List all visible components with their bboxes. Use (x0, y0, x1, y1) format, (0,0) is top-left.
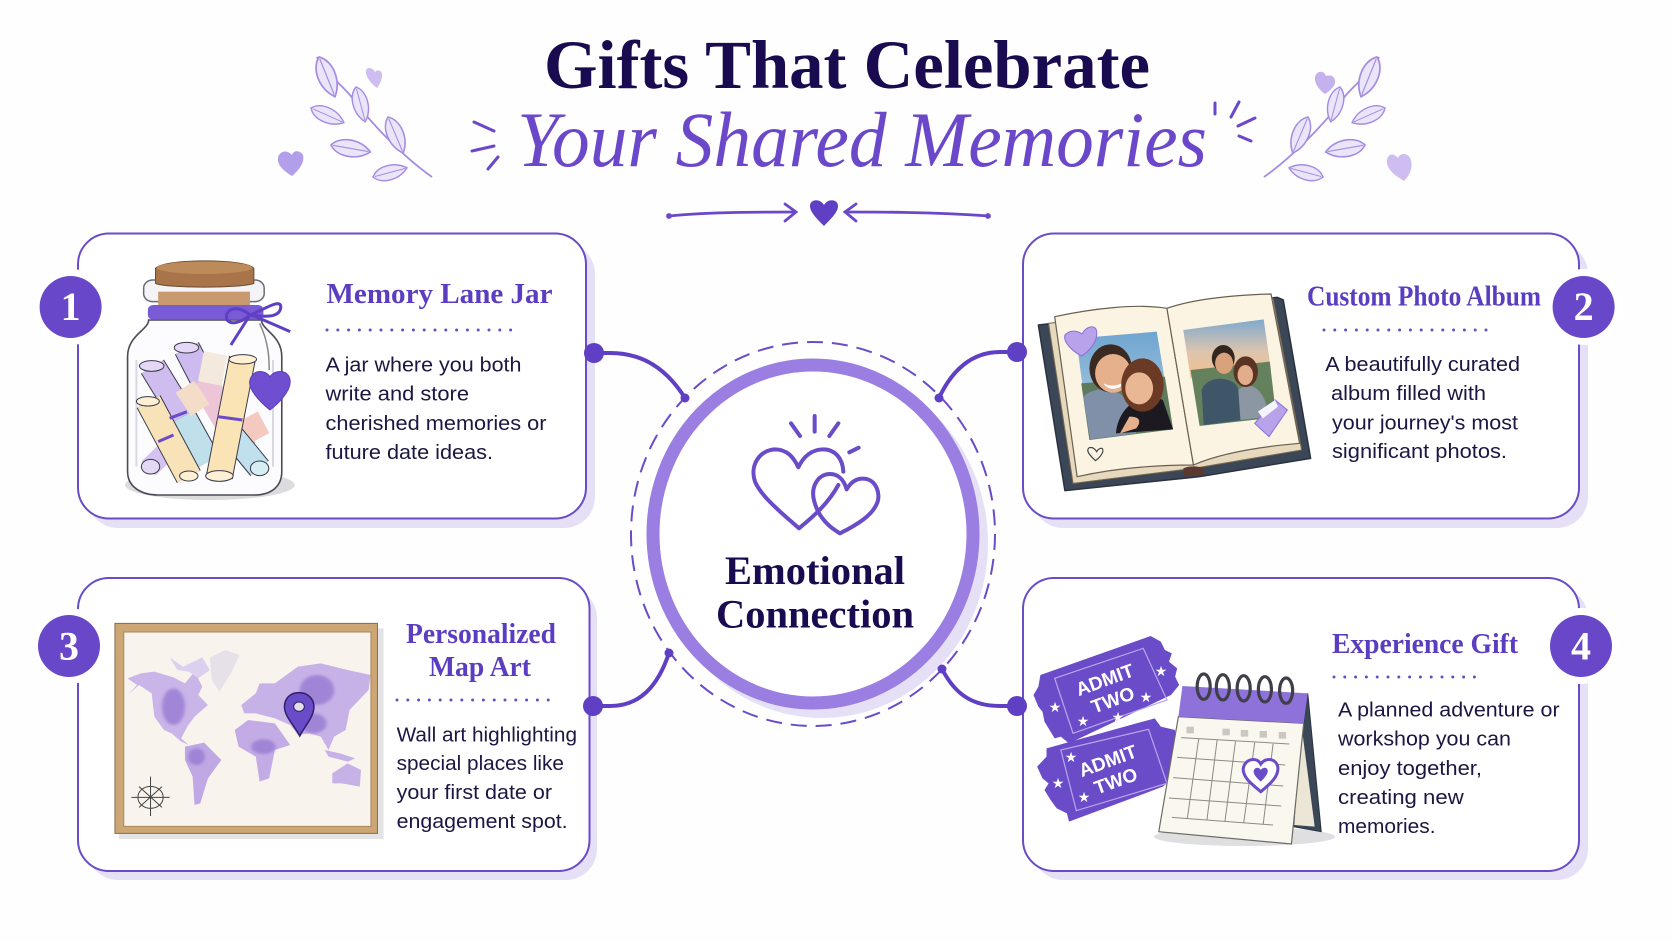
decoration: left floral branch (308, 54, 432, 184)
photo: couple at lake (1183, 319, 1276, 426)
heading: Custom Photo Album (1307, 282, 1541, 312)
icon: two overlapping hearts (753, 416, 878, 533)
badge 3: 3 (59, 624, 79, 668)
body text (1337, 699, 1560, 838)
body text: memories. (1338, 815, 1436, 838)
panel: Memory Lane Jar (33, 234, 595, 528)
body text (324, 354, 547, 464)
decoration: left sparks (472, 122, 498, 169)
icon: admit two tickets: ★ (1112, 710, 1124, 726)
heading: Experience Gift (1332, 629, 1519, 660)
panel: Personalized Map Art: Map Art (429, 652, 532, 683)
body text: creating new (1338, 786, 1464, 809)
panel: Personalized Map Art (31, 578, 597, 880)
body text: enjoy together, (1338, 757, 1482, 780)
panel: Custom Photo Album (1023, 234, 1622, 528)
body text: cherished memories or (326, 412, 547, 435)
body text: album filled with (1331, 382, 1486, 405)
badge 3 (38, 615, 100, 677)
icon: admit two tickets: TWO (1092, 764, 1141, 799)
icon: admit two tickets: TWO (1089, 683, 1138, 718)
heading: Personalized (406, 619, 556, 650)
icon: admit two tickets: ★ (1140, 690, 1152, 706)
heading: Memory Lane Jar (326, 278, 553, 310)
body text: A planned adventure or (1338, 699, 1560, 722)
body text: special places like (397, 752, 564, 775)
label: Emotional: Emotional (725, 548, 905, 593)
icon: admit two tickets: ★ (1065, 750, 1077, 766)
body text: Wall art highlighting (397, 724, 577, 747)
badge 2: 2 (1574, 284, 1594, 329)
icon: framed world map with pin (115, 623, 384, 839)
icon: admit two tickets: ★ (1077, 714, 1089, 730)
decoration: left hearts (278, 68, 382, 176)
badge 4: 4 (1571, 624, 1591, 668)
subtitle: Your Shared Memories: Your Shared Memories (517, 96, 1207, 183)
central hub: Emotional Connection (631, 342, 995, 726)
icon: admit two tickets: ADMIT (1073, 661, 1137, 701)
badge 1: 1 (61, 284, 81, 329)
body text: A beautifully curated (1325, 353, 1520, 376)
badge 2 (1553, 276, 1615, 338)
icon: memory jar with scrolls (125, 261, 295, 500)
icon: admit two tickets: ★ (1078, 790, 1090, 806)
body text: your journey's most (1332, 411, 1518, 434)
icon: flip calendar with heart (1154, 674, 1335, 846)
body text: future date ideas. (326, 441, 493, 464)
body text: workshop you can (1337, 728, 1511, 751)
label: Connection: Connection (716, 592, 914, 636)
badge 1 (40, 276, 102, 338)
title: Gifts That Celebrate: Gifts That Celebrate (544, 27, 1150, 103)
photo: couple close-up (1076, 332, 1173, 440)
icon: tickets and calendar (1033, 636, 1335, 846)
decoration: right sparks (1215, 102, 1255, 141)
icon: open photo album (1038, 294, 1311, 491)
body text: significant photos. (1332, 440, 1507, 463)
badge 4 (1550, 615, 1612, 677)
body text: your first date or (397, 781, 552, 804)
icon: admit two tickets: ★ (1052, 776, 1064, 792)
icon: admit two tickets: ★ (1155, 664, 1167, 680)
panel: Experience Gift (1023, 578, 1619, 880)
decoration: right floral branch (1264, 54, 1388, 184)
icon: admit two tickets (1033, 636, 1179, 822)
icon: admit two tickets: ★ (1049, 700, 1061, 716)
body text: engagement spot. (397, 810, 568, 833)
connector lines from centre to cards (583, 342, 1027, 716)
decoration: right hearts (1315, 72, 1412, 181)
body text (397, 724, 577, 833)
icon: admit two tickets: ADMIT (1076, 742, 1140, 782)
body text: write and store (324, 382, 469, 406)
body text: A jar where you both (326, 354, 522, 376)
divider: arrows meeting at heart (668, 200, 990, 226)
body text (1325, 353, 1520, 463)
